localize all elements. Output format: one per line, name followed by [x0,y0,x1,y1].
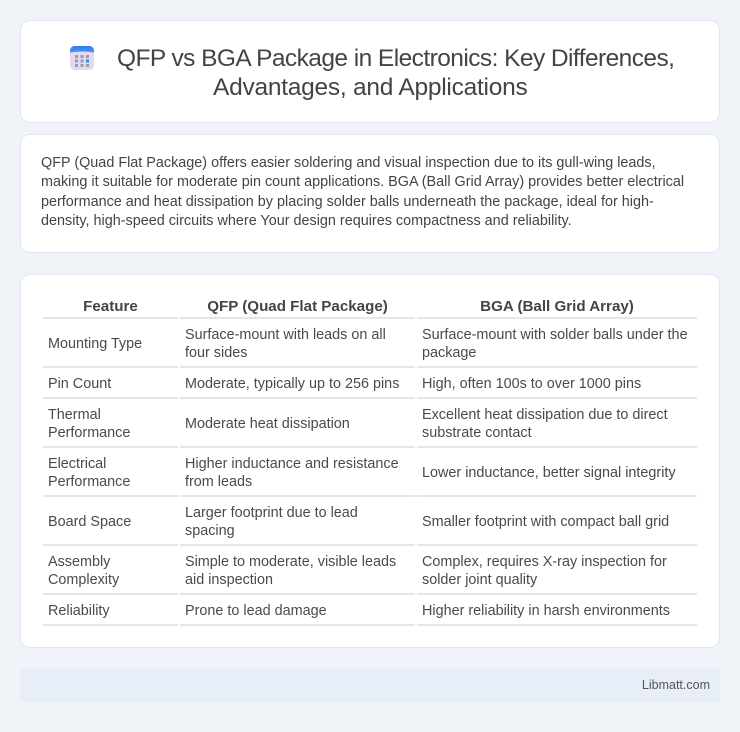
row: board space [48,505,669,539]
row: mounting type: Surface-mount with solder balls under the [422,327,688,343]
panel: intro card [20,134,720,253]
row: thermal performance: Excellent heat dissipation due to direct [422,407,668,423]
row: assembly complexity: Assembly [48,554,110,570]
row: assembly complexity: solder joint quality [422,572,537,588]
intro text: density, high-speed circuits where Your design requires compactness and reliability. [41,213,572,229]
row: pin count: High, often 100s to over 1000 pins [422,376,641,392]
row: board space: Board Space [48,514,131,530]
row: thermal performance: substrate contact [422,425,532,441]
row: assembly complexity: aid inspection [185,572,273,588]
row: mounting type [48,327,688,361]
row: reliability [48,603,670,619]
row: reliability: Reliability [48,603,110,619]
row: mounting type: package [422,345,476,361]
table header: BGA (Ball Grid Array) [480,298,634,315]
row: electrical performance: from leads [185,474,252,490]
row: pin count [48,376,641,392]
row: board space: Larger footprint due to lead [185,505,358,521]
footer bar [20,668,720,702]
row: assembly complexity: Simple to moderate, visible leads [185,554,396,570]
row: pin count: Moderate, typically up to 256 pins [185,376,399,392]
row: mounting type: Mounting Type [48,336,142,352]
row: electrical performance [48,456,676,490]
intro text: QFP (Quad Flat Package) offers easier soldering and visual inspection due to its gull-wing leads, [41,155,656,171]
row: thermal performance: Performance [48,425,130,441]
row: pin count: Pin Count [48,376,111,392]
row: electrical performance: Higher inductance and resistance [185,456,399,472]
row: assembly complexity: Complex, requires X-ray inspection for [422,554,667,570]
row: thermal performance: Thermal [48,407,101,423]
table header: QFP (Quad Flat Package) [207,298,388,315]
table header: Feature [83,298,138,315]
row: mounting type: four sides [185,345,247,361]
intro text: performance and heat dissipation by placing solder balls underneath the package, ideal for high- [41,194,654,210]
footer credit: Libmatt.com [642,678,710,692]
row: mounting type: Surface-mount with leads on all [185,327,386,343]
comparison table [43,298,697,626]
panel: comparison table [20,274,720,648]
row: reliability: Prone to lead damage [185,603,327,619]
row: electrical performance: Performance [48,474,130,490]
row: board space: Smaller footprint with compact ball grid [422,514,669,530]
panel: title card [20,20,720,123]
row: assembly complexity: Complexity [48,572,119,588]
title: QFP vs BGA Package in Electronics: Key Differences, [117,45,674,72]
row: electrical performance: Lower inductance, better signal integrity [422,465,676,481]
row: thermal performance [48,407,668,441]
row: reliability: Higher reliability in harsh environments [422,603,670,619]
icon: calendar chip [70,46,94,70]
intro text [41,155,684,229]
title: Advantages, and Applications [213,74,527,101]
table header [83,298,634,315]
row: assembly complexity [48,554,667,588]
row: electrical performance: Electrical [48,456,106,472]
row: board space: spacing [185,523,235,539]
title [117,45,674,101]
intro text: making it suitable for moderate pin count applications. BGA (Ball Grid Array) provides better electrical [41,174,684,190]
row: thermal performance: Moderate heat dissipation [185,416,350,432]
